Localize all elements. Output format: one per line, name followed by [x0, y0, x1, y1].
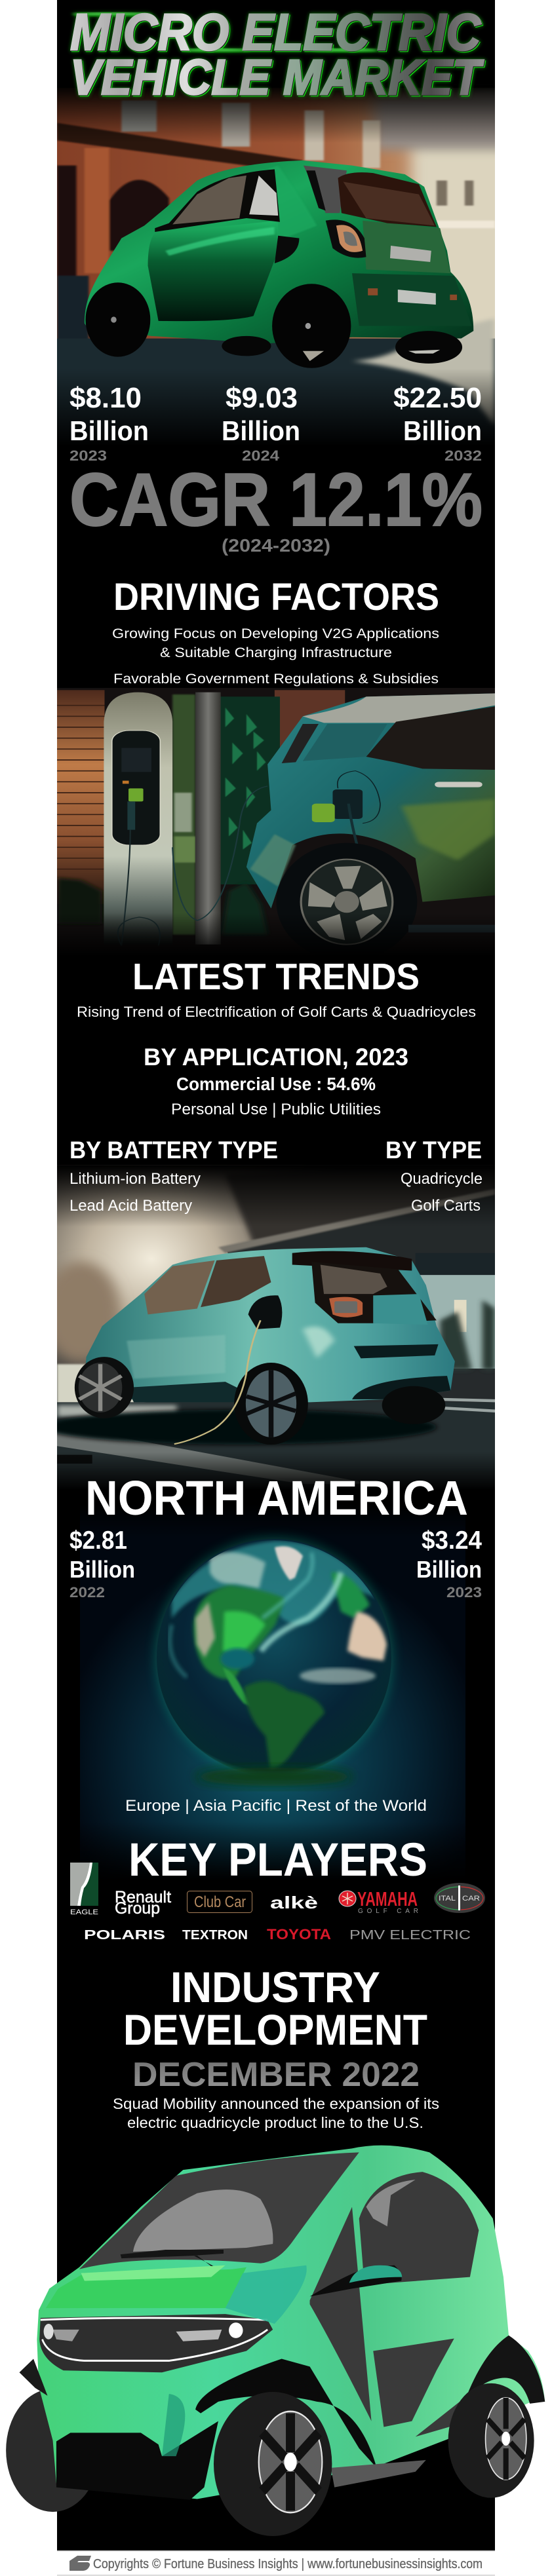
key player logos — [70, 1863, 485, 1942]
logo: Club Car — [187, 1891, 252, 1913]
logo: Yamaha golf car: YAMAHA — [357, 1887, 418, 1910]
logo: Toyota: TOYOTA — [267, 1926, 331, 1942]
logo: Yamaha golf car — [339, 1887, 418, 1915]
logo: Renault Group: Renault — [115, 1888, 171, 1906]
driving factors list: & Suitable Charging Infrastructure — [160, 645, 392, 660]
logo: Eagle — [70, 1863, 98, 1916]
logo: Ital Car: CAR — [462, 1895, 480, 1903]
by battery type — [69, 1137, 278, 1215]
rear-left wheel — [6, 2389, 100, 2512]
by application: BY APPLICATION, 2023 — [144, 1044, 408, 1070]
windshield — [79, 2152, 359, 2269]
stat 2024: 2024 — [242, 447, 280, 464]
driving factors list: Favorable Government Regulations & Subsidies — [113, 672, 439, 687]
door window — [359, 2172, 479, 2284]
stat 2032: $22.50 — [393, 382, 482, 414]
by battery type: BY BATTERY TYPE — [69, 1137, 278, 1164]
north america 2022 stat: Billion — [69, 1556, 135, 1583]
logo: Textron: TEXTRON — [182, 1928, 248, 1942]
logo: Renault Group: Group — [115, 1899, 160, 1918]
heading: industry development: INDUSTRY — [170, 1963, 380, 2011]
black panel — [57, 0, 495, 2550]
by type: Golf Carts — [411, 1197, 481, 1215]
driving factors list — [112, 626, 439, 687]
brick wall — [57, 690, 104, 904]
development description: electric quadricycle product line to the U.S. — [127, 2114, 424, 2131]
by battery type: Lithium-ion Battery — [69, 1170, 201, 1188]
by battery type: Lead Acid Battery — [69, 1197, 192, 1215]
hood highlight — [46, 2267, 246, 2308]
logo: Club Car: Club Car — [194, 1893, 246, 1911]
north america 2022 stat — [69, 1526, 135, 1601]
teal car photo — [42, 1165, 495, 1494]
stat 2032: Billion — [403, 415, 482, 446]
north america 2022 stat: 2022 — [69, 1584, 105, 1601]
logo: Polaris: POLARIS — [84, 1928, 165, 1942]
stat 2023 — [69, 382, 149, 464]
side dark panel — [310, 2207, 372, 2421]
wheels — [382, 1386, 445, 1424]
logo: Yamaha golf car: GOLF CAR — [358, 1908, 418, 1915]
north america 2023 stat — [416, 1526, 482, 1601]
heading: latest trends: LATEST TRENDS — [132, 956, 420, 998]
heading: driving factors: DRIVING FACTORS — [113, 576, 439, 618]
logo: Ital Car — [434, 1883, 485, 1913]
by type: Quadricycle — [401, 1170, 483, 1188]
car body — [85, 161, 473, 343]
globe — [155, 1537, 393, 1786]
trend description: Rising Trend of Electrification of Golf Carts & Quadricycles — [77, 1004, 476, 1020]
stat 2024 — [222, 382, 300, 464]
icon: brand logo — [69, 2556, 91, 2571]
stat 2023: 2023 — [69, 447, 107, 464]
by application: Commercial Use : 54.6% — [176, 1074, 376, 1094]
logo: alke: alkè — [270, 1893, 318, 1912]
by type — [385, 1137, 483, 1215]
CAGR: (2024-2032) — [222, 535, 330, 556]
car — [85, 1247, 455, 1402]
stat 2032: 2032 — [444, 447, 482, 464]
logo: Ital Car: ITAL — [439, 1895, 456, 1903]
title: MICRO ELECTRIC — [70, 3, 481, 61]
copyright text: Copyrights © Fortune Business Insights | www.fortunebusinessinsights.com — [93, 2557, 483, 2571]
logo: Eagle: EAGLE — [70, 1908, 98, 1916]
globe backdrop — [80, 1504, 465, 1880]
ivy — [220, 696, 280, 884]
stat 2024: Billion — [222, 415, 300, 446]
stat 2023: Billion — [69, 415, 149, 446]
charging station photo — [57, 688, 495, 972]
front wheel — [214, 2392, 332, 2536]
title — [70, 3, 484, 105]
front fascia — [39, 2314, 273, 2372]
pole — [195, 692, 221, 945]
development description — [113, 2095, 439, 2131]
logo: Renault Group — [115, 1888, 171, 1918]
hero photo: green micro car — [57, 88, 495, 434]
north america 2023 stat: $3.24 — [422, 1526, 482, 1555]
stat 2032 — [393, 382, 482, 464]
north america 2023 stat: 2023 — [446, 1584, 482, 1601]
development description: Squad Mobility announced the expansion of its — [113, 2095, 439, 2112]
driving factors list: Growing Focus on Developing V2G Applications — [112, 626, 439, 641]
shrubs — [222, 882, 267, 935]
by application: Personal Use | Public Utilities — [171, 1101, 381, 1118]
stat 2023: $8.10 — [69, 382, 142, 414]
north america 2023 stat: Billion — [416, 1556, 482, 1583]
mirror — [310, 2265, 402, 2296]
rear wheel — [448, 2383, 534, 2498]
fenders — [195, 2358, 377, 2468]
heading: industry development — [123, 1963, 427, 2054]
title: VEHICLE MARKET — [70, 50, 484, 105]
stat 2024: $9.03 — [226, 382, 298, 414]
other regions: Europe | Asia Pacific | Rest of the World — [125, 1797, 427, 1815]
logo: PMV Electric: PMV ELECTRIC — [349, 1928, 471, 1942]
north america 2022 stat: $2.81 — [69, 1526, 127, 1555]
footer — [57, 2550, 495, 2576]
market size stats — [69, 382, 482, 464]
green quadricycle — [6, 2146, 545, 2536]
heading: industry development: DEVELOPMENT — [123, 2005, 427, 2054]
car body — [37, 2146, 545, 2499]
heading: north america: NORTH AMERICA — [85, 1471, 468, 1525]
heading: key players: KEY PLAYERS — [128, 1834, 427, 1886]
by application — [144, 1044, 408, 1118]
by type: BY TYPE — [385, 1137, 482, 1164]
CAGR: CAGR 12.1% — [69, 459, 483, 542]
lower black — [56, 2421, 218, 2500]
car body — [246, 693, 495, 909]
development date: DECEMBER 2022 — [132, 2056, 420, 2094]
wheel — [277, 843, 417, 929]
wheels — [222, 336, 271, 356]
charger post — [104, 692, 172, 945]
